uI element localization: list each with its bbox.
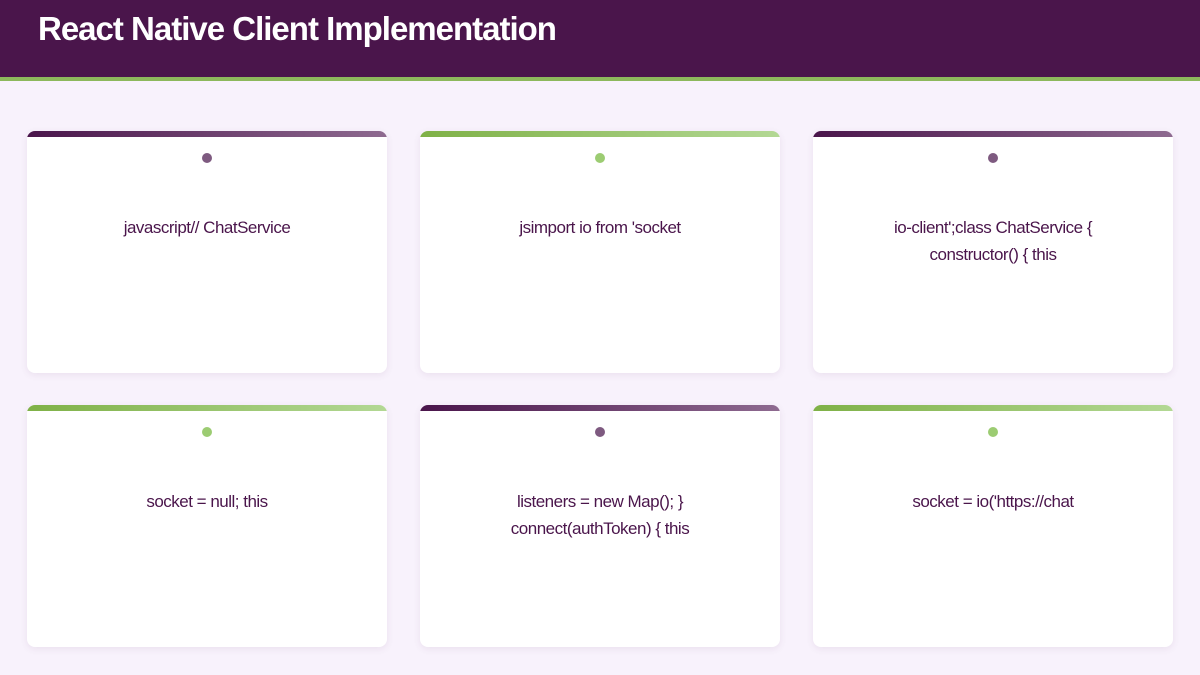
text: connect(authToken) { this — [511, 519, 689, 538]
card 1 — [27, 131, 387, 373]
dot — [202, 427, 212, 437]
text — [894, 218, 1092, 264]
dot — [595, 153, 605, 163]
dot — [202, 153, 212, 163]
text: javascript// ChatService — [124, 218, 290, 237]
dot — [595, 427, 605, 437]
card 6 — [813, 405, 1173, 647]
text: socket = null; this — [146, 492, 268, 511]
card 2 — [420, 131, 780, 373]
card 3 — [813, 131, 1173, 373]
dot — [988, 427, 998, 437]
text: constructor() { this — [930, 245, 1056, 264]
card 5 — [420, 405, 780, 647]
text: socket = io('https://chat — [912, 492, 1074, 511]
text: io-client';class ChatService { — [894, 218, 1092, 237]
text — [511, 492, 690, 538]
card 4 — [27, 405, 387, 647]
text: jsimport io from 'socket — [519, 218, 681, 237]
title: React Native Client Implementation — [38, 10, 556, 47]
dot — [988, 153, 998, 163]
text: listeners = new Map(); } — [517, 492, 683, 511]
header — [0, 0, 1200, 77]
